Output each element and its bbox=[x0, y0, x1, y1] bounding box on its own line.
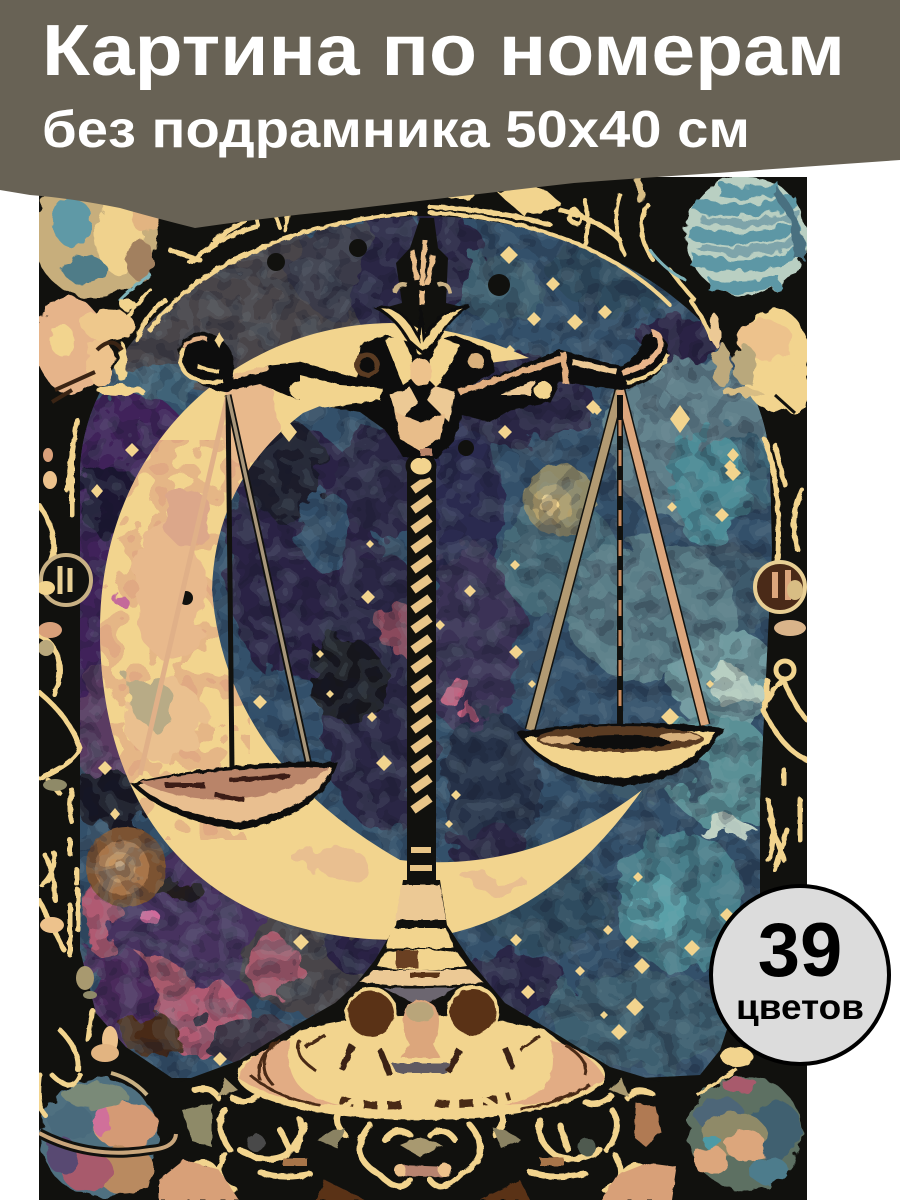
finial bbox=[377, 240, 469, 353]
left pan bbox=[130, 762, 338, 830]
balance beam with ornament bbox=[178, 332, 668, 458]
left medallion bbox=[37, 555, 91, 605]
subtitle: без подрамника 50х40 см bbox=[42, 101, 750, 159]
base of the scale bbox=[180, 880, 660, 1130]
twisted column bbox=[407, 455, 436, 892]
left side gems bbox=[38, 448, 119, 1062]
right pan bbox=[516, 723, 724, 786]
black backing of finial bbox=[390, 218, 460, 333]
glowing orb bbox=[524, 464, 596, 536]
painting bbox=[33, 174, 809, 1200]
scale strings right bbox=[530, 390, 705, 730]
right medallion bbox=[755, 562, 806, 679]
planet bottom left with ring bbox=[39, 1073, 176, 1196]
cosmic background inside the arch bbox=[55, 210, 780, 1100]
dark spots bbox=[179, 239, 510, 605]
badge: 39 colours: цветов bbox=[736, 988, 864, 1027]
scale strings left bbox=[140, 395, 310, 775]
planet top left bbox=[39, 196, 159, 299]
top ornament bbox=[446, 176, 644, 225]
lower ornament fills bbox=[159, 1047, 753, 1200]
stars bbox=[91, 246, 741, 1066]
crescent moon bbox=[100, 323, 642, 940]
lower ornament scrolls bbox=[190, 1089, 652, 1190]
right flower ornament bbox=[710, 308, 809, 414]
colour mottling bbox=[75, 210, 775, 1100]
left flower ornament bbox=[36, 297, 144, 402]
badge: 39 colours: 39 bbox=[758, 908, 842, 993]
arch frame ornament bbox=[120, 194, 712, 340]
planet bottom right bbox=[688, 1076, 802, 1190]
title: Картина по номерам bbox=[42, 11, 845, 91]
badge: 39 colours bbox=[711, 886, 889, 1064]
side frame ornaments bbox=[39, 420, 807, 1115]
header banner bbox=[0, 0, 900, 228]
planet top right bbox=[686, 176, 806, 296]
brown orb bbox=[86, 827, 166, 924]
